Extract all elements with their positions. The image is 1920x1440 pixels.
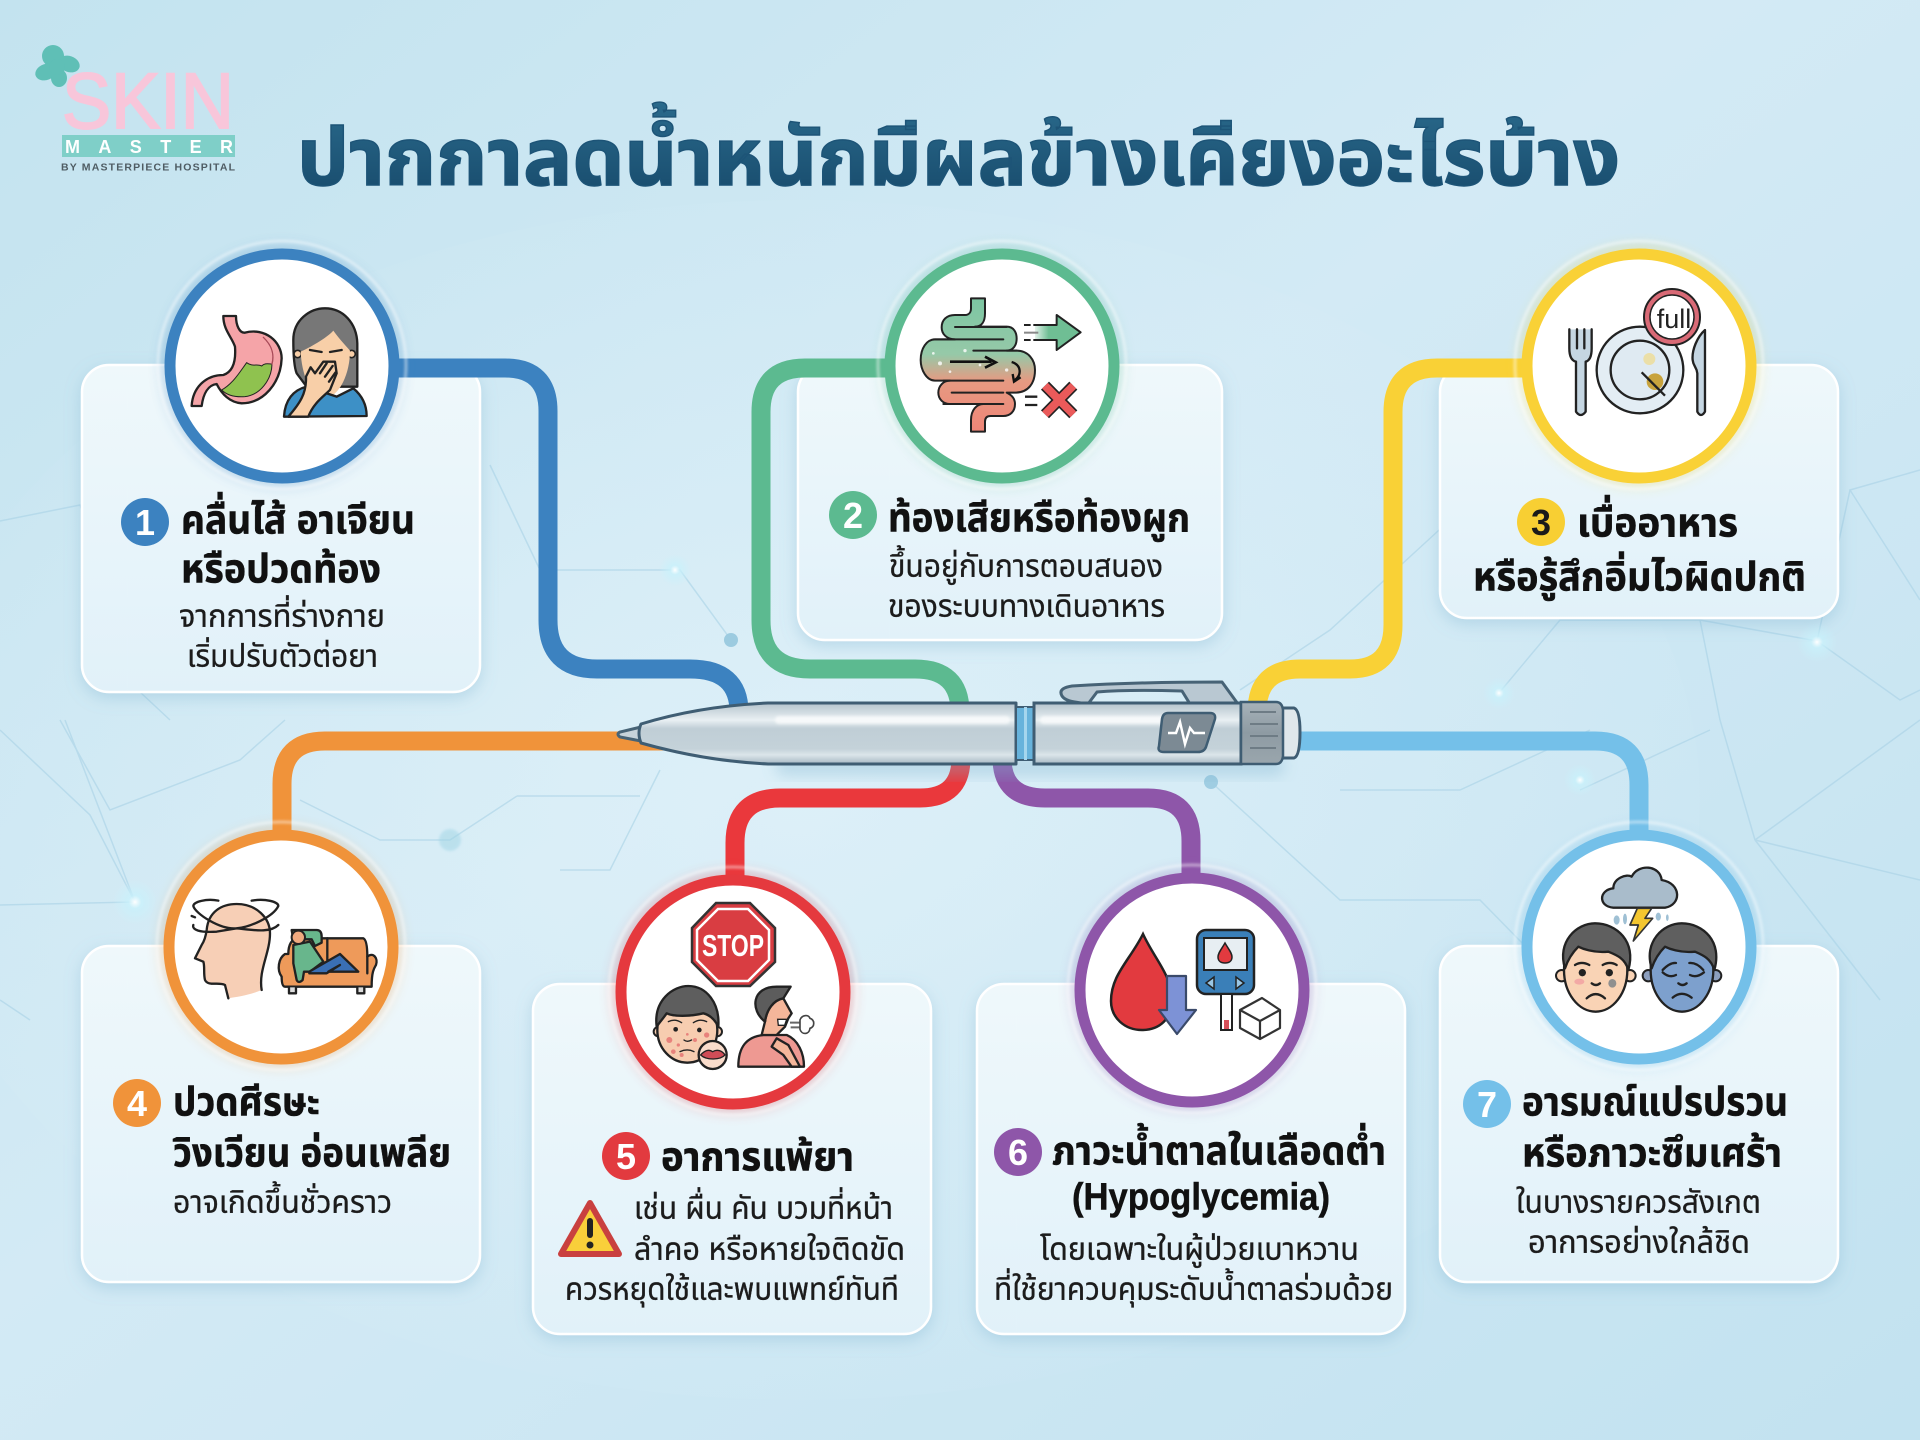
panel: 7 mood [1440,946,1838,1282]
number badge 1 [121,498,169,546]
heading 4: ปวดศีรษะ [173,1080,320,1124]
heading 4 [173,1080,451,1176]
pen grip [1241,702,1283,764]
description 5: เช่น ผื่น คัน บวมที่หน้า [634,1186,893,1226]
heading 3 [1473,494,1806,602]
number badge 6: 6 [1008,1132,1028,1173]
ring 6 [1068,865,1316,1113]
icon: fork [1569,329,1592,415]
description 5: ลำคอ หรือหายใจติดขัด [634,1232,905,1266]
heading 6: (Hypoglycemia) [1072,1176,1330,1218]
icon: rash face [654,986,727,1069]
connector: red [735,758,961,882]
card 7 background [1440,946,1838,1282]
number badge 1: 1 [135,502,155,543]
panel: 6 hypoglycemia [977,984,1405,1334]
insulin pen [618,682,1300,776]
number badge 4: 4 [127,1083,147,1124]
icon: nauseous woman [284,308,367,417]
icon: short of breath person [738,987,814,1067]
description 7 [1516,1184,1761,1260]
pen barrel highlight [775,716,1010,724]
panel: 1 nausea [82,365,480,692]
icon circle 7: mood swings [1515,822,1763,1070]
icon: sugar cube [1240,998,1280,1039]
heading 7: หรือภาวะซึมเศร้า [1522,1130,1782,1176]
icon: glucose meter [1197,930,1254,1030]
description 5 [565,1186,905,1308]
icon: dizzy head [192,900,278,998]
panel: 3 appetite [1440,365,1838,618]
icon: storm cloud [1602,868,1677,941]
number badge 2: 2 [843,495,863,536]
card 6 background [977,984,1405,1334]
description 4: อาจเกิดขึ้นชั่วคราว [173,1180,392,1220]
description 6 [994,1232,1393,1308]
pen clip [1061,682,1238,704]
ring 1 [158,241,406,489]
icon circle 1: stomach and nauseous woman [158,241,406,489]
ring 4 [157,822,405,1070]
number badge 6 [994,1128,1042,1176]
connector: light blue [1295,741,1639,838]
logo [33,45,236,174]
heading 6 [1052,1122,1386,1218]
connector: orange [282,741,665,840]
icon: full sign [1644,289,1700,345]
card 1 background [82,365,480,692]
pen upper highlight [1040,716,1165,724]
heading 7: อารมณ์แปรปรวน [1522,1080,1788,1124]
icon: knife [1693,330,1705,415]
pen badge with pulse [1159,713,1215,752]
ring 2 [878,241,1126,489]
number badge 5 [602,1132,650,1180]
heading 7 [1522,1080,1788,1176]
heading 6: ภาวะน้ำตาลในเลือดต่ำ [1052,1122,1386,1174]
pen shadow [775,756,1285,776]
heading 2: ท้องเสียหรือท้องผูก [888,496,1190,542]
number badge 4 [113,1079,161,1127]
icon: depressed blue face [1643,923,1721,1012]
description 1: จากการที่ร่างกาย [179,594,385,634]
description 2: ขึ้นอยู่กับการตอบสนอง [889,544,1163,584]
icon: full sign: full [1657,304,1691,334]
pen upper barrel [1034,703,1241,764]
connector: blue [395,368,739,712]
icon: blood drop [1111,934,1172,1030]
icon circle 2: intestines [878,241,1126,489]
description 1 [179,594,385,674]
number badge 2 [829,491,877,539]
title: ปากกาลดน้ำหนักมีผลข้างเคียงอะไรบ้าง [297,102,1620,202]
icon: person on couch [279,930,377,993]
logo band text: MASTER [65,137,233,157]
logo tagline: BY MASTERPIECE HOSPITAL [61,162,236,174]
heading 5: อาการแพ้ยา [661,1134,854,1180]
number badge 3 [1517,498,1565,546]
icon: stop sign [692,903,775,986]
number badge 7: 7 [1477,1084,1497,1125]
card 5 background [533,984,931,1334]
card 3 background [1440,365,1838,618]
pen needle tip [618,727,641,741]
heading 1 [181,492,415,592]
number badge 3: 3 [1531,502,1551,543]
heading 4: วิงเวียน อ่อนเพลีย [173,1130,451,1176]
card 2 background [798,365,1222,640]
icon: stomach [192,316,282,406]
icon: stop sign: STOP [702,928,764,963]
icon: green arrow [1024,315,1081,350]
connector: purple [1002,758,1191,878]
icon: warning triangle [561,1203,619,1254]
icon circle 5: stop sign and allergy [609,867,857,1115]
panel: 2 bowel [798,365,1222,640]
icon: plate [1597,327,1683,413]
panel: 5 allergy [533,984,931,1334]
icon circle 3: plate and full sign [1515,241,1763,489]
heading 1: คลื่นไส้ อาเจียน [181,492,415,542]
icon circle 4: dizziness and resting [157,822,405,1070]
ring 7 [1515,822,1763,1070]
logo wordmark: SKIN [62,56,234,145]
icon: sad face [1556,923,1636,1012]
panel: 4 headache [82,946,480,1282]
icon circle 6: low blood sugar [1068,865,1316,1113]
icon: down arrow [1159,976,1196,1034]
heading 3: เบื่ออาหาร [1577,494,1738,546]
heading 1: หรือปวดท้อง [181,546,381,592]
pen lower barrel and nose [639,703,1016,764]
description 2 [888,544,1165,624]
description 5: ควรหยุดใช้และพบแพทย์ทันที [565,1272,899,1308]
description 7: อาการอย่างใกล้ชิด [1528,1224,1750,1260]
description 2: ของระบบทางเดินอาหาร [888,588,1165,624]
number badge 7 [1463,1080,1511,1128]
icon: red x [1025,386,1073,414]
heading 3: หรือรู้สึกอิ่มไวผิดปกติ [1473,551,1806,602]
pen blue band [1016,707,1034,760]
logo band [62,135,235,157]
icon: intestines [921,298,1035,432]
description 1: เริ่มปรับตัวต่อยา [187,636,378,674]
description 6: ที่ใช้ยาควบคุมระดับน้ำตาลร่วมด้วย [994,1268,1393,1308]
connector: green [761,368,960,712]
ring 5 [609,867,857,1115]
number badge 5: 5 [616,1136,636,1177]
ring 3 [1515,241,1763,489]
pen dial end [1280,708,1300,758]
description 7: ในบางรายควรสังเกต [1516,1184,1761,1220]
card 4 background [82,946,480,1282]
description 6: โดยเฉพาะในผู้ป่วยเบาหวาน [1040,1232,1359,1268]
connector: yellow [1257,368,1530,712]
icon: logo clover [33,45,82,87]
